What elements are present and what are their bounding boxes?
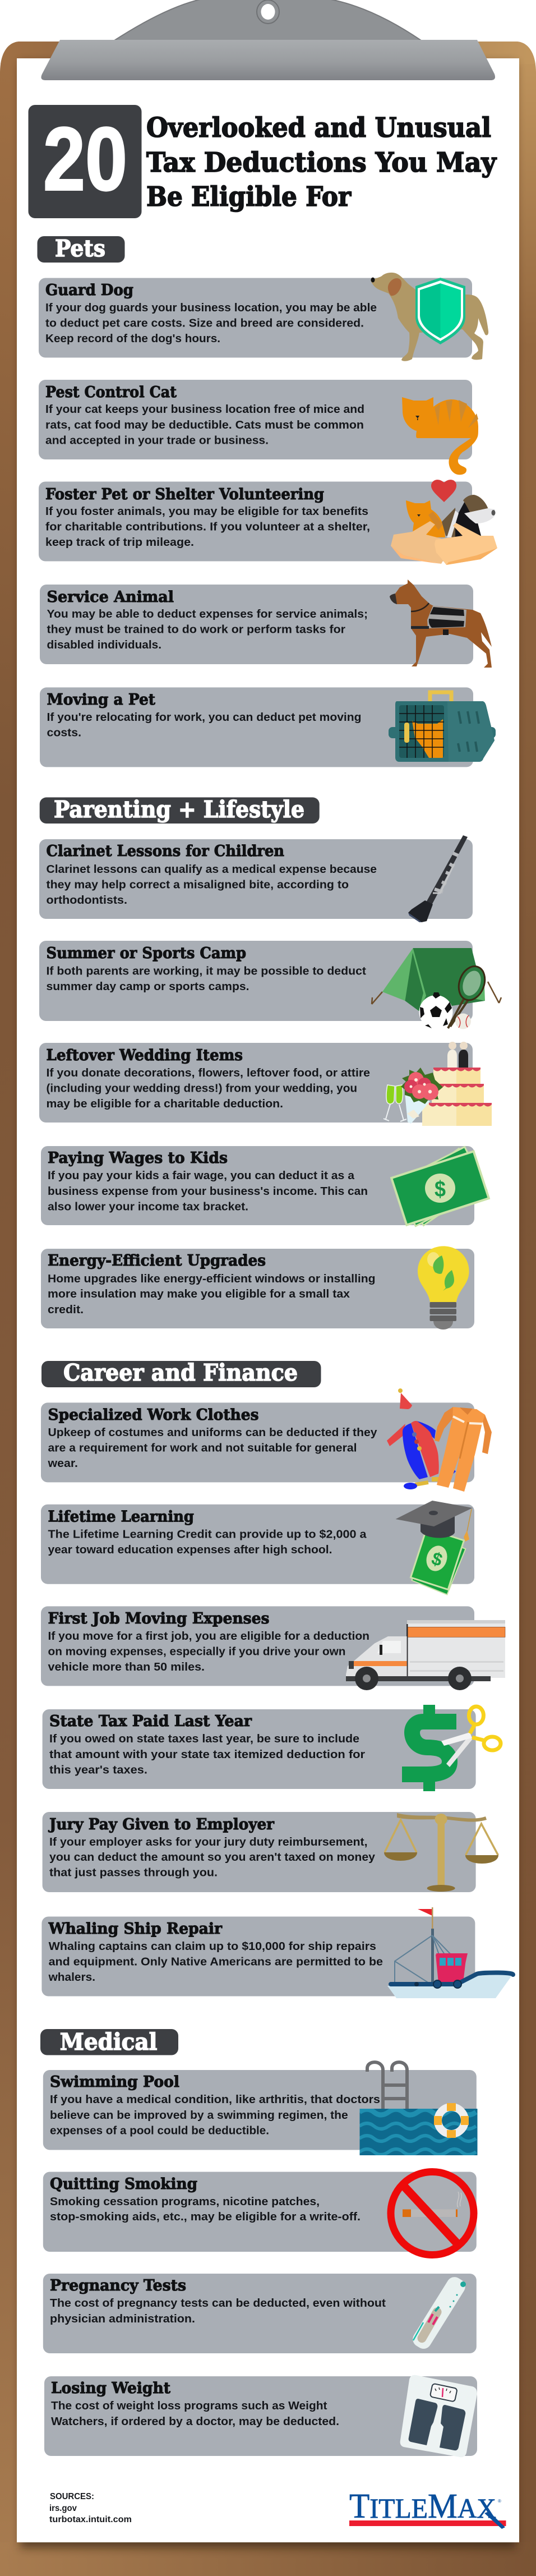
logo: TitleMax: TITLEMAX <box>349 2487 496 2526</box>
panel: First Job Moving Expenses <box>41 1606 474 1686</box>
panel: Service Animal <box>40 585 473 664</box>
panel: Moving a Pet <box>40 687 473 767</box>
panel: Lifetime Learning: Lifetime Learning <box>48 1508 194 1526</box>
panel: Clarinet Lessons for Children: Clarinet Lessons for Children <box>46 843 284 860</box>
icon: moving truck <box>346 1620 505 1690</box>
panel: Pregnancy Tests: The cost of pregnancy tests can be deducted, even without <box>50 2297 386 2310</box>
icon: tent, soccer ball, racket and baseball <box>372 948 501 1029</box>
panel: Guard Dog: to deduct pet care costs. Size and breed are considered. <box>45 318 364 330</box>
icon: cat <box>402 397 478 475</box>
panel: Clarinet Lessons for Children: orthodontists. <box>46 894 127 907</box>
panel: Swimming Pool: expenses of a pool could be deductible. <box>50 2125 269 2137</box>
panel: Foster Pet or Shelter Volunteering: for charitable contributions. If you volunteer at a shelter, <box>45 521 370 533</box>
panel: Whaling Ship Repair: whalers. <box>48 1971 95 1984</box>
panel: Swimming Pool: believe can be improved by a swimming regimen, the <box>50 2109 348 2122</box>
panel: Guard Dog: Guard Dog <box>45 282 133 299</box>
icon: fishing boat <box>387 1907 513 1998</box>
section heading: Parenting + Lifestyle: Parenting + Lifestyle <box>54 796 304 823</box>
panel: Summer or Sports Camp: summer day camp or sports camps. <box>46 981 249 993</box>
panel: Specialized Work Clothes: wear. <box>47 1457 78 1470</box>
panel: Whaling Ship Repair: Whaling Ship Repair <box>48 1920 223 1938</box>
icon: cash <box>391 1147 489 1226</box>
panel: Moving a Pet: costs. <box>47 727 81 739</box>
icon: wedding cake, bouquet and champagne glasses <box>383 1042 492 1126</box>
panel: Clarinet Lessons for Children: Clarinet lessons can qualify as a medical expense because <box>46 863 377 876</box>
panel: Jury Pay Given to Employer: that just passes through you. <box>49 1867 218 1879</box>
logo: TitleMax: ® <box>498 2499 501 2504</box>
icon: dollar sign with scissors <box>402 1705 501 1791</box>
icon: service dog with vest <box>390 579 492 668</box>
panel: Energy-Efficient Upgrades: Home upgrades like energy-efficient windows or installing <box>48 1273 376 1285</box>
clipboard clip <box>41 0 495 80</box>
panel: Losing Weight: The cost of weight loss programs such as Weight <box>51 2400 327 2412</box>
panel: Lifetime Learning: year toward education expenses after high school. <box>48 1544 332 1556</box>
panel: Guard Dog: If your dog guards your business location, you may be able <box>45 302 377 314</box>
panel: Leftover Wedding Items: (including your wedding dress!) from your wedding, you <box>46 1083 357 1095</box>
panel: Lifetime Learning: The Lifetime Learning Credit can provide up to $2,000 a <box>48 1528 367 1540</box>
panel: Summer or Sports Camp: If both parents are working, it may be possible to deduct <box>46 965 366 977</box>
panel: Pest Control Cat: If your cat keeps your business location free of mice and <box>45 403 364 416</box>
panel: Energy-Efficient Upgrades: credit. <box>48 1304 84 1316</box>
panel: Specialized Work Clothes: Upkeep of costumes and uniforms can be deducted if they <box>48 1427 377 1439</box>
icon: bathroom scale <box>400 2375 477 2457</box>
panel: Guard Dog: Keep record of the dog's hours. <box>45 333 220 345</box>
panel: Swimming Pool <box>43 2070 477 2150</box>
panel: Paying Wages to Kids: business expense from your business's income. This can <box>48 1185 368 1198</box>
panel: State Tax Paid Last Year: State Tax Paid Last Year <box>49 1713 252 1730</box>
panel: Swimming Pool: If you have a medical condition, like arthritis, that doctors <box>50 2094 380 2106</box>
panel: Leftover Wedding Items <box>39 1043 473 1123</box>
title: Overlooked and Unusual <box>146 112 491 144</box>
panel: First Job Moving Expenses: vehicle more than 50 miles. <box>48 1661 205 1673</box>
panel: Specialized Work Clothes <box>41 1402 474 1482</box>
sources <box>49 2492 132 2524</box>
title <box>146 112 497 213</box>
icon: graduation cap and cash: $ <box>429 1548 445 1570</box>
panel: Losing Weight: Losing Weight <box>51 2380 171 2397</box>
panel: Pest Control Cat: and accepted in your trade or business. <box>45 434 269 447</box>
panel: Foster Pet or Shelter Volunteering: keep track of trip mileage. <box>45 536 194 549</box>
title: Tax Deductions You May <box>146 147 497 178</box>
panel: Foster Pet or Shelter Volunteering: If you foster animals, you may be eligible for tax benefits <box>45 505 368 518</box>
panel: Jury Pay Given to Employer: Jury Pay Given to Employer <box>48 1816 275 1833</box>
panel: State Tax Paid Last Year: that amount with your state tax itemized deduction for <box>49 1749 365 1761</box>
panel: Summer or Sports Camp: Summer or Sports Camp <box>46 945 246 962</box>
icon: cash: $ <box>435 1177 446 1202</box>
panel: Swimming Pool: Swimming Pool <box>50 2073 179 2091</box>
panel: Service Animal: disabled individuals. <box>47 639 161 651</box>
panel: State Tax Paid Last Year: If you owed on state taxes last year, be sure to include <box>49 1733 359 1745</box>
section heading: Pets <box>37 235 124 263</box>
icon: light bulb with leaves <box>418 1246 469 1330</box>
panel: State Tax Paid Last Year: this year's taxes. <box>49 1764 147 1777</box>
panel: First Job Moving Expenses: on moving expenses, especially if you drive your own <box>48 1646 345 1658</box>
panel: Pregnancy Tests: Pregnancy Tests <box>50 2277 186 2294</box>
panel: Energy-Efficient Upgrades: more insulation may make you eligible for a small tax <box>48 1288 350 1300</box>
panel: Paying Wages to Kids: Paying Wages to Kids <box>48 1149 228 1167</box>
panel: State Tax Paid Last Year <box>43 1709 476 1789</box>
panel: Pest Control Cat: Pest Control Cat <box>45 384 177 401</box>
icon: graduation cap and cash <box>396 1501 473 1595</box>
panel: Quitting Smoking <box>43 2172 477 2252</box>
panel: Pest Control Cat: rats, cat food may be deductible. Cats must be common <box>45 419 364 431</box>
panel: Pregnancy Tests: physician administration. <box>50 2313 195 2325</box>
panel: Paying Wages to Kids: If you pay your kids a fair wage, you can deduct it as a <box>48 1170 355 1182</box>
panel: First Job Moving Expenses: First Job Moving Expenses <box>48 1610 269 1627</box>
panel: Lifetime Learning <box>41 1505 474 1584</box>
icon: dog with shield <box>371 273 488 361</box>
panel: Quitting Smoking: Quitting Smoking <box>50 2175 197 2193</box>
panel: Specialized Work Clothes: Specialized Work Clothes <box>48 1406 259 1424</box>
icon: balance scales <box>384 1813 498 1892</box>
number badge: 20: 20 <box>43 109 127 209</box>
section heading: Career and Finance: Career and Finance <box>63 1359 298 1386</box>
panel: Moving a Pet: Moving a Pet <box>47 691 156 709</box>
panel: Leftover Wedding Items: may be eligible for a charitable deduction. <box>46 1098 283 1110</box>
panel: Pest Control Cat <box>39 380 472 459</box>
panel: Service Animal: You may be able to deduct expenses for service animals; <box>47 608 368 620</box>
panel: Service Animal: they must be trained to do work or perform tasks for <box>47 624 345 636</box>
section heading: Pets: Pets <box>55 235 105 262</box>
panel: Service Animal: Service Animal <box>47 588 174 606</box>
panel: Losing Weight: Watchers, if ordered by a doctor, may be deducted. <box>51 2416 339 2428</box>
panel: Paying Wages to Kids <box>41 1146 474 1225</box>
panel: Summer or Sports Camp <box>39 941 473 1021</box>
panel: Pregnancy Tests <box>43 2274 477 2353</box>
panel: Foster Pet or Shelter Volunteering <box>39 481 472 561</box>
panel: Leftover Wedding Items: Leftover Wedding Items <box>46 1047 243 1064</box>
panel: Specialized Work Clothes: are a requirement for work and not suitable for general <box>48 1442 357 1454</box>
panel: Clarinet Lessons for Children: they may help correct a misaligned bite, according to <box>46 878 349 891</box>
panel: Whaling Ship Repair: Whaling captains can claim up to $10,000 for ship repairs <box>49 1940 376 1953</box>
icon: pool with ladder and life ring <box>359 2062 478 2155</box>
icon: pet carrier with cat <box>389 692 496 762</box>
panel: Jury Pay Given to Employer: you can deduct the amount so you aren't taxed on money <box>49 1851 376 1864</box>
section heading: Medical: Medical <box>60 2028 157 2055</box>
icon: no smoking sign <box>391 2172 474 2255</box>
icon: clown costume and orange coverall <box>387 1388 492 1492</box>
icon: clarinet <box>408 835 468 922</box>
panel: Paying Wages to Kids: also lower your income tax bracket. <box>48 1201 248 1213</box>
icon: pregnancy test <box>410 2274 468 2352</box>
panel: Jury Pay Given to Employer: If your employer asks for your jury duty reimbursement, <box>49 1836 368 1848</box>
panel: Quitting Smoking: stop-smoking aids, etc., may be eligible for a write-off. <box>50 2211 361 2223</box>
panel: Guard Dog <box>39 278 472 358</box>
sources: SOURCES: <box>50 2492 94 2501</box>
panel: First Job Moving Expenses: If you move for a first job, you are eligible for a deduction <box>48 1630 369 1643</box>
panel: Quitting Smoking: Smoking cessation programs, nicotine patches, <box>50 2196 320 2208</box>
sources: irs.gov <box>49 2504 77 2513</box>
panel: Moving a Pet: If you're relocating for work, you can deduct pet moving <box>47 711 361 724</box>
panel: Clarinet Lessons for Children <box>39 839 473 919</box>
icon: hands holding cat and dog with heart <box>391 480 497 565</box>
panel: Jury Pay Given to Employer <box>43 1812 476 1892</box>
title: Be Eligible For <box>146 181 352 213</box>
panel: Leftover Wedding Items: If you donate decorations, flowers, leftover food, or attire <box>46 1067 370 1079</box>
panel: Foster Pet or Shelter Volunteering: Foster Pet or Shelter Volunteering <box>45 486 324 503</box>
panel: Whaling Ship Repair <box>41 1916 475 1996</box>
panel: Energy-Efficient Upgrades <box>41 1249 474 1328</box>
panel: Whaling Ship Repair: and equipment. Only Native Americans are permitted to be <box>49 1956 383 1968</box>
panel: Losing Weight <box>44 2376 477 2456</box>
sources: turbotax.intuit.com <box>49 2515 132 2524</box>
panel: Energy-Efficient Upgrades: Energy-Efficient Upgrades <box>48 1252 266 1269</box>
